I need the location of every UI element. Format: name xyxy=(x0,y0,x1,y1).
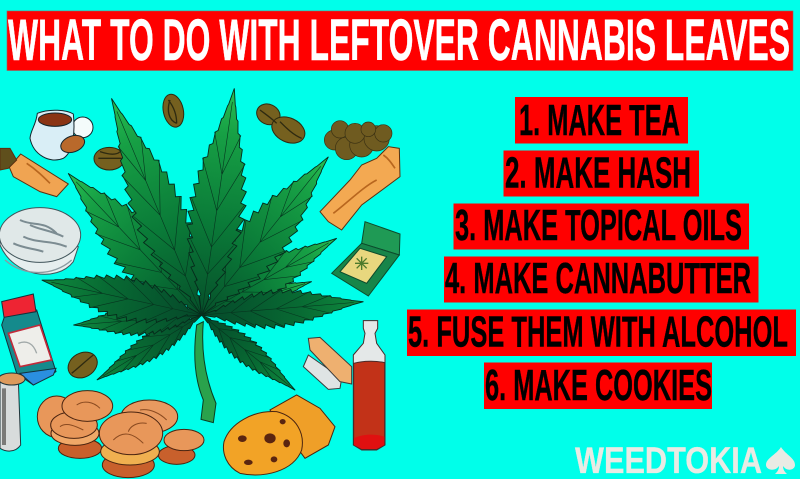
cannabis leaf xyxy=(37,84,365,400)
test tube xyxy=(0,373,25,451)
hash bar left xyxy=(0,148,68,197)
biscuits pile xyxy=(37,391,204,478)
green box xyxy=(332,222,400,296)
item 1: 1. MAKE TEA xyxy=(519,97,680,145)
capsule with wrap xyxy=(303,337,352,389)
item 1 xyxy=(515,97,688,145)
illustration: leaf and leftover products xyxy=(0,84,400,478)
tea cup xyxy=(30,110,93,160)
seeds xyxy=(63,92,309,383)
item 2 xyxy=(504,150,699,198)
bowl of cream xyxy=(0,208,81,274)
icon: spade xyxy=(766,447,795,474)
hash bud xyxy=(324,121,392,160)
jar xyxy=(2,294,56,385)
bottle of infused alcohol xyxy=(353,321,385,450)
chocolate chip cookies xyxy=(223,395,335,475)
stem xyxy=(195,322,216,423)
list of uses xyxy=(407,97,796,410)
hash bar right xyxy=(320,147,400,230)
